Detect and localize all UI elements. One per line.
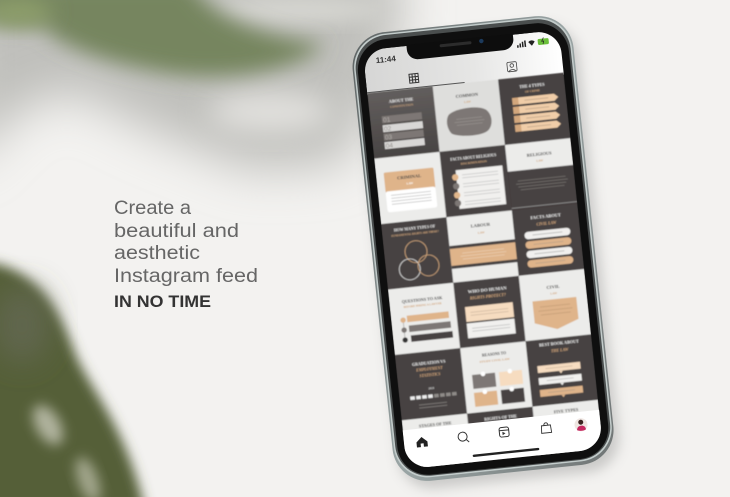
post: who do human rights protect: RIGHTS PROTECT? [470, 292, 506, 301]
post: facts about civil law: CIVIL LAW [536, 220, 557, 227]
post: common law: LAW [464, 99, 471, 104]
status icons [516, 37, 549, 48]
post: about the constitution: 02 [384, 125, 392, 133]
post: labour law: LABOUR [470, 222, 491, 229]
post: facts about religious discrimination [440, 145, 512, 217]
post: criminal law: CRIMINAL [397, 173, 421, 180]
post: who do human rights protect: WHO DO HUMAN [468, 285, 507, 294]
blurred shadow: top left foliage [0, 0, 400, 170]
blurred leaf: bottom left [0, 262, 145, 497]
post: how many types of venn: FUNDAMENTAL RIGHTS ARE THERE? [391, 230, 440, 238]
headline text block: Instagram feed [114, 266, 258, 287]
post: graduation vs employment statistics [395, 348, 467, 421]
post: the 4 types of crime [498, 73, 571, 145]
bottom navigation bar [403, 410, 604, 470]
post: labour law: LAW [478, 230, 485, 235]
phone mockup [349, 13, 617, 487]
headline text block: Create a [114, 198, 191, 219]
headline text block: IN NO TIME [114, 292, 211, 311]
post: the 4 types of crime: THE 4 TYPES [519, 82, 545, 89]
post: how many types of venn [381, 217, 453, 290]
post: rights of the [467, 406, 536, 462]
post: religious law [505, 138, 577, 211]
post: graduation vs employment statistics: 2021 [428, 386, 435, 391]
post: five types [532, 398, 601, 456]
post: religious law: RELIGIOUS [526, 150, 552, 158]
post: reasons to study [460, 341, 533, 414]
nav icon: reels [499, 427, 509, 437]
post: criminal law: LAW [406, 181, 413, 185]
post: graduation vs employment statistics: GRADUATION VS [412, 359, 446, 367]
post: rights of the: RIGHTS OF THE [484, 413, 517, 422]
post: stages of the: STAGES OF THE [419, 420, 452, 429]
post: how many types of venn: HOW MANY TYPES OF [394, 224, 436, 233]
post: graduation vs employment statistics: STATISTICS [419, 372, 441, 379]
headline text block: aesthetic [114, 243, 200, 264]
post: questions to ask [388, 283, 460, 355]
tab icon: tagged person [507, 62, 517, 72]
post: labour law [446, 210, 519, 283]
post: about the constitution [367, 86, 440, 159]
active tab underline [367, 82, 465, 93]
nav icon: home [416, 436, 428, 447]
post: reasons to study: STUDY CIVIL LAW [479, 357, 511, 364]
speaker and camera [439, 39, 484, 48]
headline text block: beautiful and [114, 221, 239, 242]
status time: 11:44 [375, 54, 397, 65]
post: about the constitution: 01 [383, 116, 391, 124]
post: facts about civil law: FACTS ABOUT [530, 212, 561, 220]
post: about the constitution: 03 [385, 134, 393, 142]
post: about the constitution: ABOUT THE [389, 96, 414, 104]
post: religious law: LAW [536, 158, 543, 163]
post: civil law: CIVIL [546, 284, 560, 290]
notch [406, 34, 514, 60]
post: facts about civil law [512, 203, 584, 276]
post: reasons to study: REASONS TO [482, 351, 506, 358]
post: civil law: LAW [550, 291, 557, 296]
post: best book about the law [526, 334, 598, 407]
post: common law: COMMON [455, 92, 479, 99]
post grid [367, 73, 605, 486]
post: best book about the law: BEST BOOK ABOUT [539, 339, 579, 348]
post: common law [433, 79, 505, 152]
post: five types: FIVE TYPES [554, 407, 579, 414]
phone shadow [355, 21, 623, 492]
post: civil law [519, 269, 591, 341]
nav icon: profile avatar [574, 418, 588, 432]
screen header [363, 30, 564, 95]
screen [363, 30, 605, 486]
post: questions to ask: BEFORE HIRING A LAWYER [404, 302, 443, 309]
nav icon: search [458, 432, 469, 443]
post: graduation vs employment statistics: EMPLOYMENT [415, 366, 443, 373]
post: stages of the [402, 412, 473, 467]
nav icon: shop bag [541, 422, 552, 433]
post: about the constitution: 04 [386, 142, 394, 150]
post: best book about the law: THE LAW [551, 347, 569, 354]
home indicator [473, 448, 539, 457]
post: facts about religious discrimination: FACTS ABOUT RELIGIOUS [450, 153, 496, 162]
post: criminal law [374, 152, 447, 224]
post: questions to ask: QUESTIONS TO ASK [401, 295, 443, 304]
phone frame [349, 13, 617, 484]
post: facts about religious discrimination: DISCRIMINATION [461, 159, 488, 166]
headline text block [114, 198, 258, 311]
post: about the constitution: CONSTITUTION [390, 102, 414, 109]
post: the 4 types of crime: OF CRIME [525, 88, 540, 94]
tab icon: grid [409, 73, 419, 83]
post: who do human rights protect [453, 276, 526, 348]
